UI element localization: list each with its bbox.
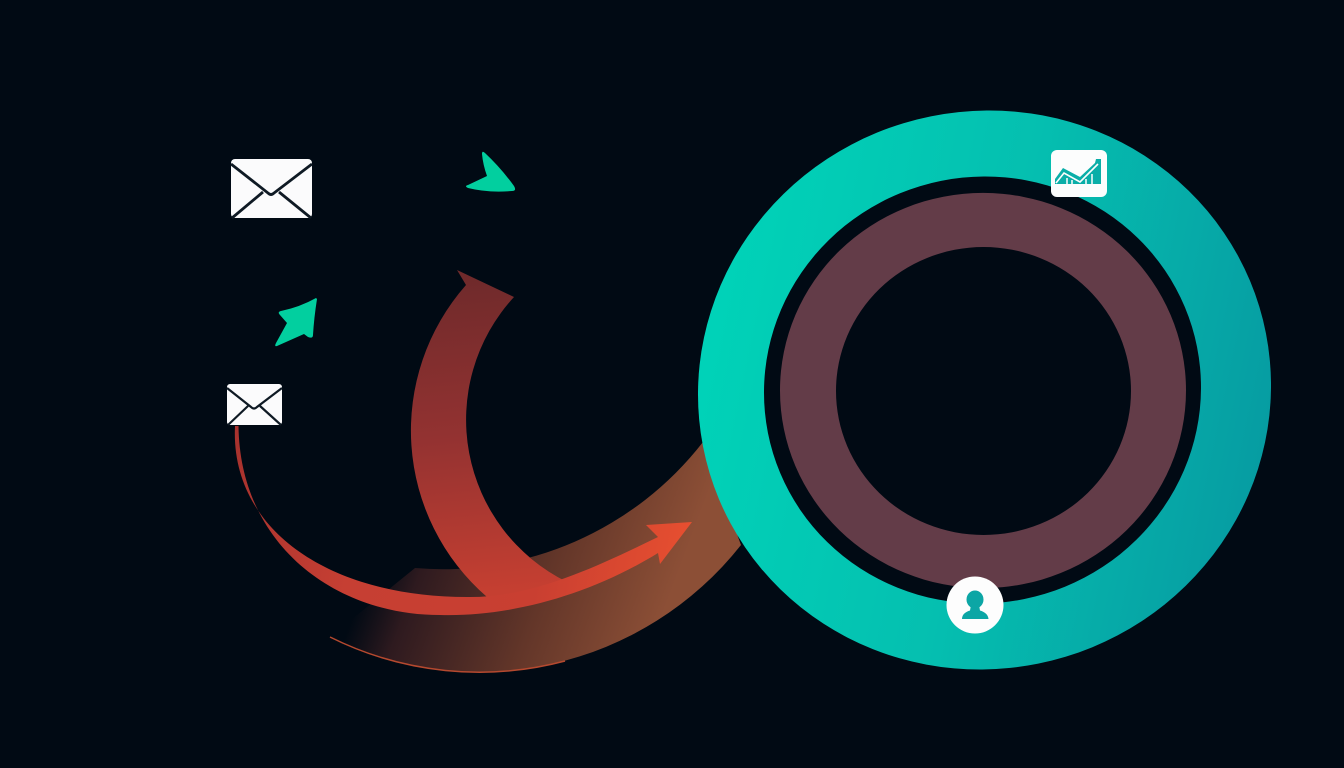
icon: green arrowhead top: [466, 152, 515, 192]
icon: green arrowhead left: [275, 298, 317, 346]
icon: large envelope: [231, 159, 312, 218]
icon: small envelope: [227, 384, 282, 425]
thin lower edge of band: [330, 637, 565, 672]
icon: line chart badge: [1051, 150, 1107, 197]
thin red curved arrow: [235, 426, 692, 615]
brown curved band: [330, 442, 741, 672]
large red curved arrow: [411, 270, 567, 606]
outer teal ring: [696, 108, 1273, 672]
inner maroon ring: [780, 193, 1186, 588]
dark gap: [763, 175, 1202, 605]
ring diagram: [696, 108, 1273, 672]
icon: person badge: [946, 576, 1004, 634]
